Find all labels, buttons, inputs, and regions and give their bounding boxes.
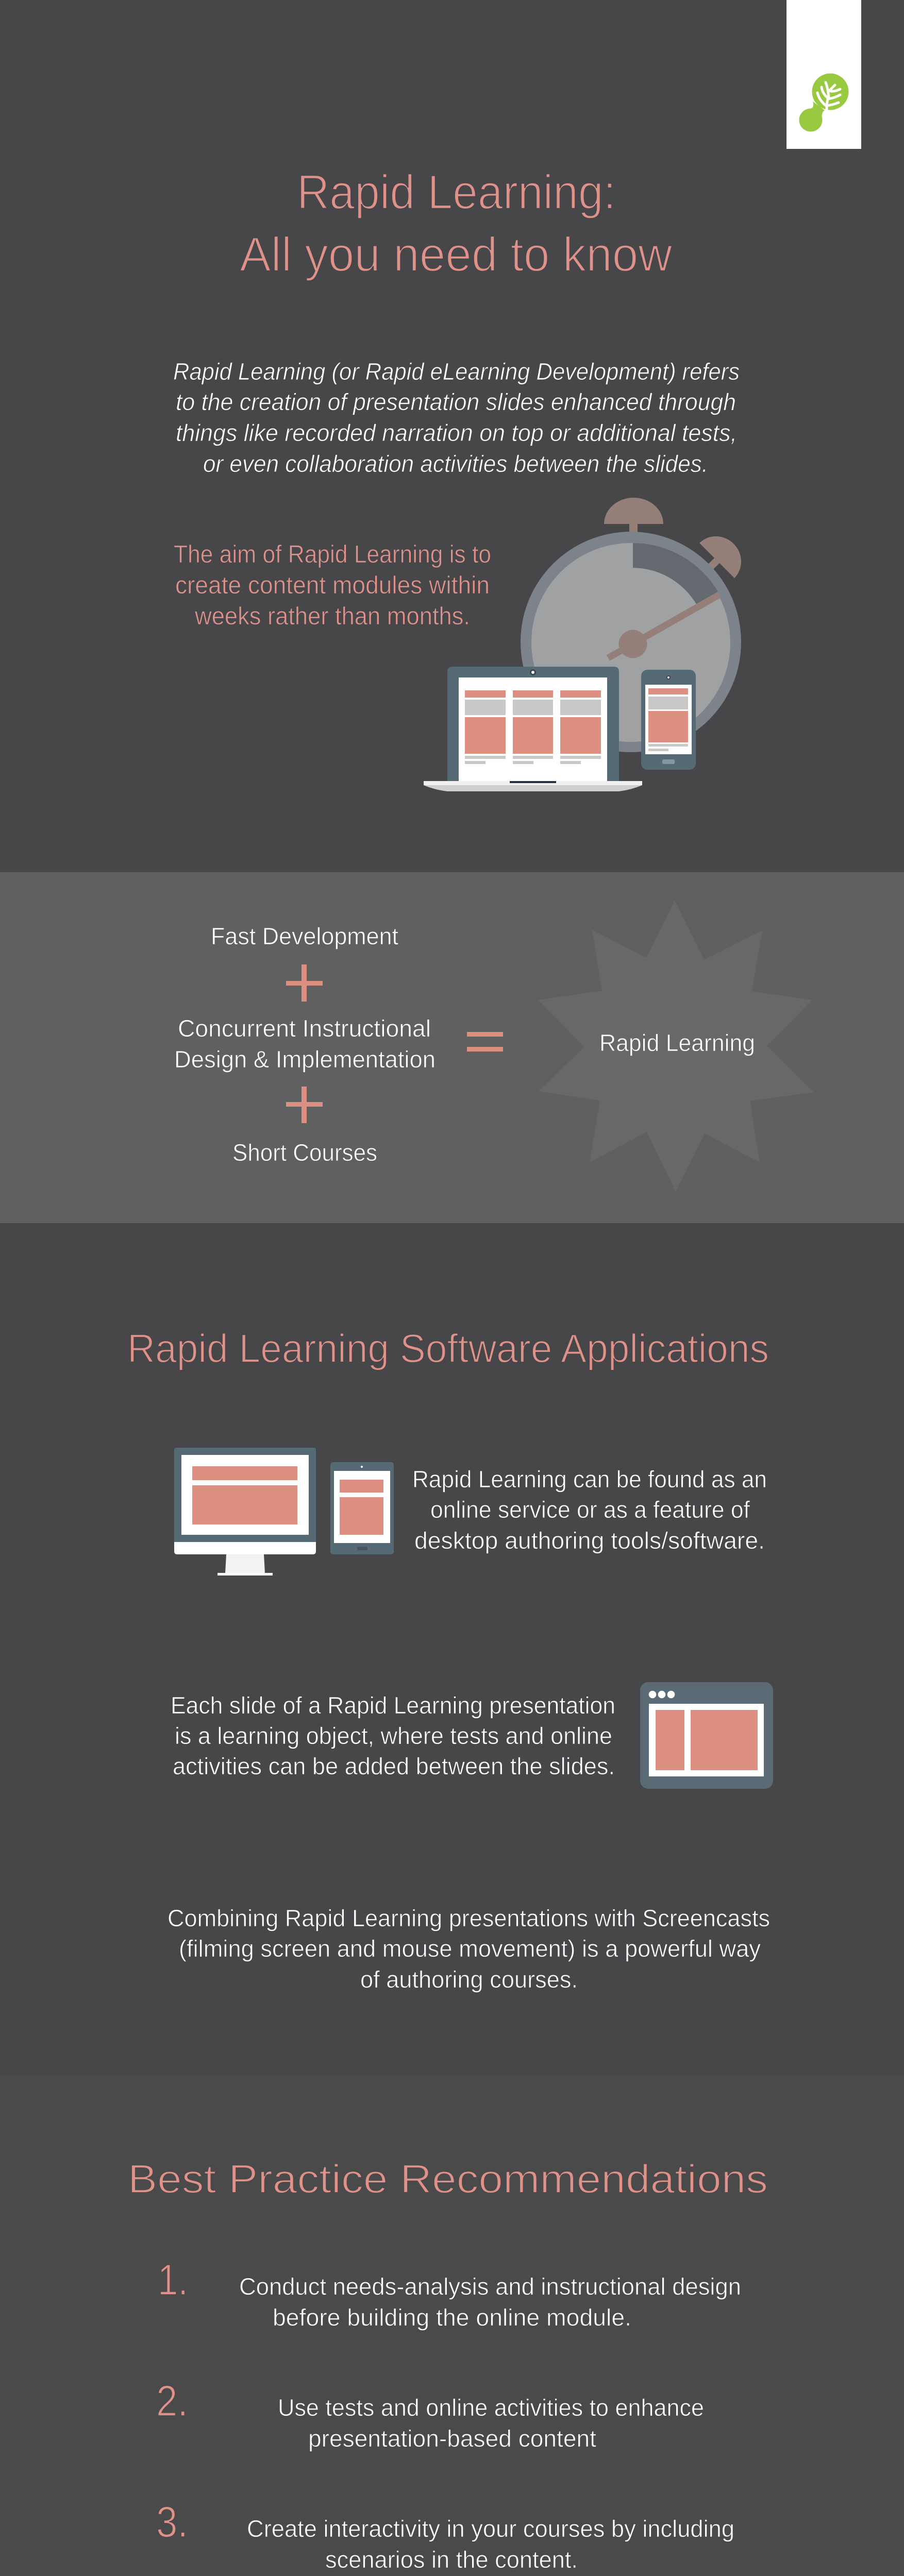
aim statement: The aim of Rapid Learning is to bbox=[174, 541, 491, 568]
icon: laptop bbox=[424, 667, 642, 791]
text: fast development: Fast Development bbox=[211, 923, 398, 950]
recommendation 3: scenarios in the content. bbox=[325, 2546, 578, 2573]
text: screencasts: of authoring courses. bbox=[360, 1966, 578, 1993]
title: Rapid Learning: bbox=[297, 165, 616, 219]
recommendation 2: presentation-based content bbox=[308, 2425, 596, 2452]
text: screencasts bbox=[168, 1905, 770, 1993]
text: rapid learning result: Rapid Learning bbox=[599, 1029, 755, 1056]
aim statement: weeks rather than months. bbox=[194, 603, 470, 630]
title bbox=[240, 165, 673, 281]
recommendation 3: 3. bbox=[156, 2498, 188, 2546]
text: concurrent instructional design and implementation: Concurrent Instructional bbox=[178, 1015, 431, 1042]
intro paragraph: or even collaboration activities between the slides. bbox=[203, 450, 708, 477]
text: online service: desktop authoring tools/software. bbox=[414, 1527, 765, 1554]
recommendation 1 bbox=[158, 2256, 741, 2331]
panel: rapid learning equation bbox=[0, 872, 904, 1223]
text: learning object: Each slide of a Rapid Learning presentation bbox=[171, 1692, 615, 1719]
recommendation 3 bbox=[156, 2498, 734, 2573]
text: learning object bbox=[171, 1692, 615, 1780]
text: online service: Rapid Learning can be found as an bbox=[412, 1466, 767, 1493]
recommendation 2: 2. bbox=[156, 2377, 188, 2425]
text: screencasts: Combining Rapid Learning presentations with Screencasts bbox=[168, 1905, 770, 1931]
icon: desktop monitor bbox=[174, 1448, 316, 1575]
recommendation 1: Conduct needs-analysis and instructional design bbox=[239, 2273, 741, 2300]
text: learning object: is a learning object, where tests and online bbox=[175, 1722, 612, 1749]
intro paragraph: to the creation of presentation slides enhanced through bbox=[176, 388, 736, 415]
icon: equals sign bbox=[467, 1032, 503, 1052]
intro paragraph: things like recorded narration on top or additional tests, bbox=[176, 419, 737, 446]
recommendation 2 bbox=[156, 2377, 704, 2452]
icon: plus sign bbox=[286, 1087, 323, 1123]
text: learning object: activities can be added between the slides. bbox=[173, 1753, 615, 1780]
text: screencasts: (filming screen and mouse movement) is a powerful way bbox=[179, 1935, 761, 1962]
icon: stopwatch bbox=[521, 498, 751, 752]
starburst bbox=[538, 901, 814, 1192]
icon: tablet bbox=[330, 1462, 394, 1554]
recommendation 1: before building the online module. bbox=[273, 2304, 631, 2331]
heading: software applications: Rapid Learning Software Applications bbox=[127, 1326, 769, 1371]
icon: phone bbox=[641, 670, 696, 770]
text: concurrent instructional design and implementation: Design & Implementation bbox=[174, 1046, 436, 1073]
text: concurrent instructional design and implementation bbox=[174, 1015, 436, 1073]
recommendation 3: Create interactivity in your courses by including bbox=[247, 2515, 734, 2542]
recommendation 1: 1. bbox=[158, 2256, 188, 2304]
logo tab: white bookmark with leaf bbox=[786, 0, 861, 149]
aim statement: create content modules within bbox=[175, 572, 490, 599]
icon: plus sign bbox=[286, 964, 323, 1002]
icon: browser window bbox=[640, 1682, 773, 1789]
intro paragraph: Rapid Learning (or Rapid eLearning Development) refers bbox=[173, 358, 740, 385]
recommendation 2: Use tests and online activities to enhance bbox=[278, 2394, 704, 2421]
intro paragraph bbox=[173, 358, 740, 477]
title: All you need to know bbox=[240, 227, 673, 281]
aim statement bbox=[174, 541, 491, 630]
text: short courses: Short Courses bbox=[232, 1139, 377, 1166]
text: online service: online service or as a feature of bbox=[430, 1496, 750, 1523]
text: online service bbox=[412, 1466, 767, 1554]
heading: best practice recommendations: Best Practice Recommendations bbox=[128, 2156, 768, 2201]
